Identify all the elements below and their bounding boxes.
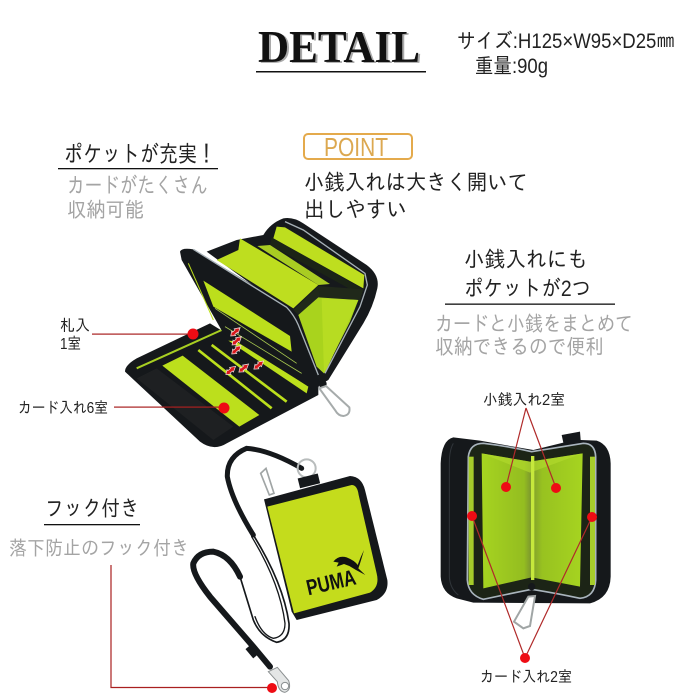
leader: hook xyxy=(111,565,277,693)
heading: two coin pockets xyxy=(445,247,615,305)
lanyard xyxy=(193,448,302,667)
icon: carabiner xyxy=(319,380,350,416)
point badge: POINT xyxy=(324,132,388,162)
text: coin pocket opens wide xyxy=(304,170,528,222)
text: cards and coins together xyxy=(435,313,633,359)
icon: upper clip xyxy=(261,468,274,495)
icon: zipper pull xyxy=(514,583,535,628)
wallet body xyxy=(264,476,388,620)
wallet with lanyard photo xyxy=(193,448,388,692)
product size and weight xyxy=(457,30,675,78)
icon: lower clip xyxy=(268,667,290,692)
heading: pockets: ポケットが充実！ xyxy=(64,141,216,167)
title: DETAIL xyxy=(258,21,420,72)
icon: cat logo xyxy=(333,550,365,575)
text: coin pocket opens wide: 出しやすい xyxy=(304,197,407,222)
text: anti-drop hook: 落下防止のフック付き xyxy=(9,538,189,560)
heading: two coin pockets: ポケットが2つ xyxy=(464,276,591,301)
text: card storage xyxy=(67,173,208,222)
leader lines and dots: card compartments xyxy=(467,511,597,663)
label: six card slots: カード入れ6室 xyxy=(18,400,108,417)
text: card storage: カードがたくさん xyxy=(67,173,208,198)
icon: buckle xyxy=(245,644,260,658)
leader lines and dots: coin compartments xyxy=(501,408,561,493)
product size and weight: サイズ:H125×W95×D25㎜ xyxy=(457,30,675,53)
text: card storage: 収納可能 xyxy=(67,199,144,222)
label: two card compartments: カード入れ2室 xyxy=(480,669,572,686)
text: coin pocket opens wide: 小銭入れは大きく開いて xyxy=(304,170,528,195)
title: DETAIL xyxy=(260,22,422,73)
text: cards and coins together: カードと小銭をまとめて xyxy=(435,313,633,336)
product size and weight: 重量:90g xyxy=(475,55,548,78)
heading: two coin pockets: 小銭入れにも xyxy=(464,247,588,272)
label: six card slots xyxy=(18,400,230,417)
open wallet photo xyxy=(125,218,378,447)
text: cards and coins together: 収納できるので便利 xyxy=(435,336,604,359)
label: bill compartment xyxy=(60,318,198,353)
label: bill compartment: 1室 xyxy=(60,336,81,353)
brand name: PUMA xyxy=(304,565,358,600)
icon: red arrows xyxy=(224,325,266,377)
icon: ring xyxy=(298,459,316,477)
label: two coin compartments: 小銭入れ2室 xyxy=(483,391,565,409)
heading: hook: フック付き xyxy=(45,496,139,521)
open wallet front photo xyxy=(441,432,611,628)
label: bill compartment: 札入 xyxy=(60,318,90,335)
